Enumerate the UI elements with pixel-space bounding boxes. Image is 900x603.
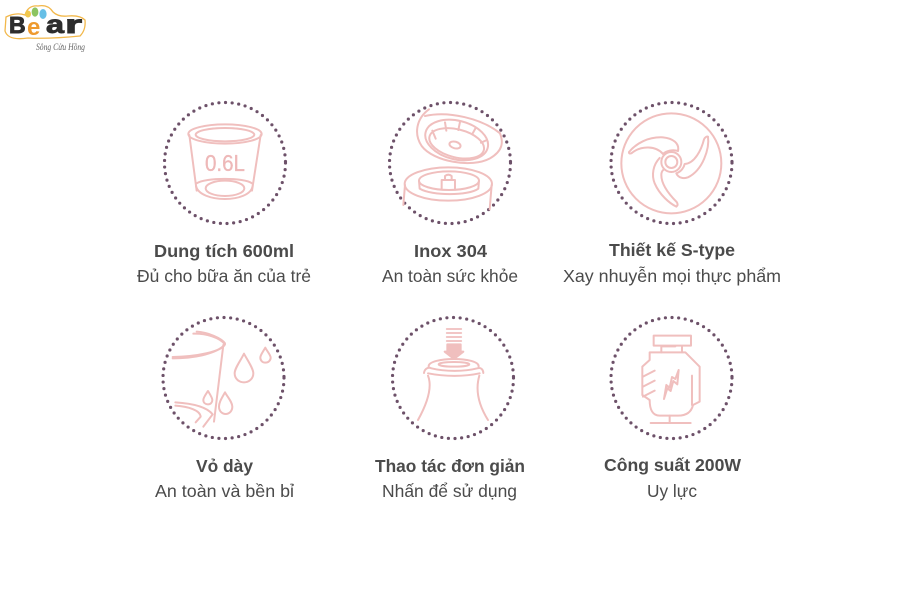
dotted ring [390,102,510,224]
dotted ring [392,318,514,438]
subtitle: Nhấn để sử dụng [382,481,517,501]
logo wordmark: B [9,12,26,38]
dotted ring [164,102,286,224]
logo wordmark [9,11,82,41]
panel: capacity [137,102,311,286]
subtitle: Uy lực [647,481,697,501]
logo wordmark: e [27,14,40,41]
heading: Dung tích 600ml [154,241,294,261]
heading: Thiết kế S-type [609,240,735,260]
logo wordmark: a [46,11,65,39]
icon: cup wall and droplets [173,332,271,427]
logo: Bear [5,6,85,52]
panel: S-type blade [563,102,781,286]
logo wordmark: r [65,11,82,39]
icon: motor with lightning [642,336,700,423]
icon: press-down bottle [418,329,488,420]
panel: power [604,318,741,501]
heading: Inox 304 [414,241,487,261]
heading: Vỏ dày [196,456,253,476]
heading: Công suất 200W [604,455,741,475]
panel: easy operation [375,318,525,501]
logo outline [5,6,85,39]
icon: S-blade [621,113,721,213]
dotted ring [611,102,732,224]
icon: cup 0.6L [188,124,262,199]
subtitle: An toàn sức khỏe [382,266,518,286]
panel: thick body [155,318,294,501]
subtitle: An toàn và bền bỉ [155,481,294,501]
subtitle: Đủ cho bữa ăn của trẻ [137,266,311,286]
dotted ring [611,318,732,438]
heading: Thao tác đơn giản [375,456,525,476]
subtitle: Xay nhuyễn mọi thực phẩm [563,265,781,286]
icon: cup 0.6L: 0.6L [205,150,245,176]
logo signature: Sông Cửu Hồng [36,42,85,52]
dotted ring [163,318,284,438]
paw dots [25,7,47,19]
panel: stainless steel [382,102,518,286]
icon: open lid and base [403,109,502,209]
